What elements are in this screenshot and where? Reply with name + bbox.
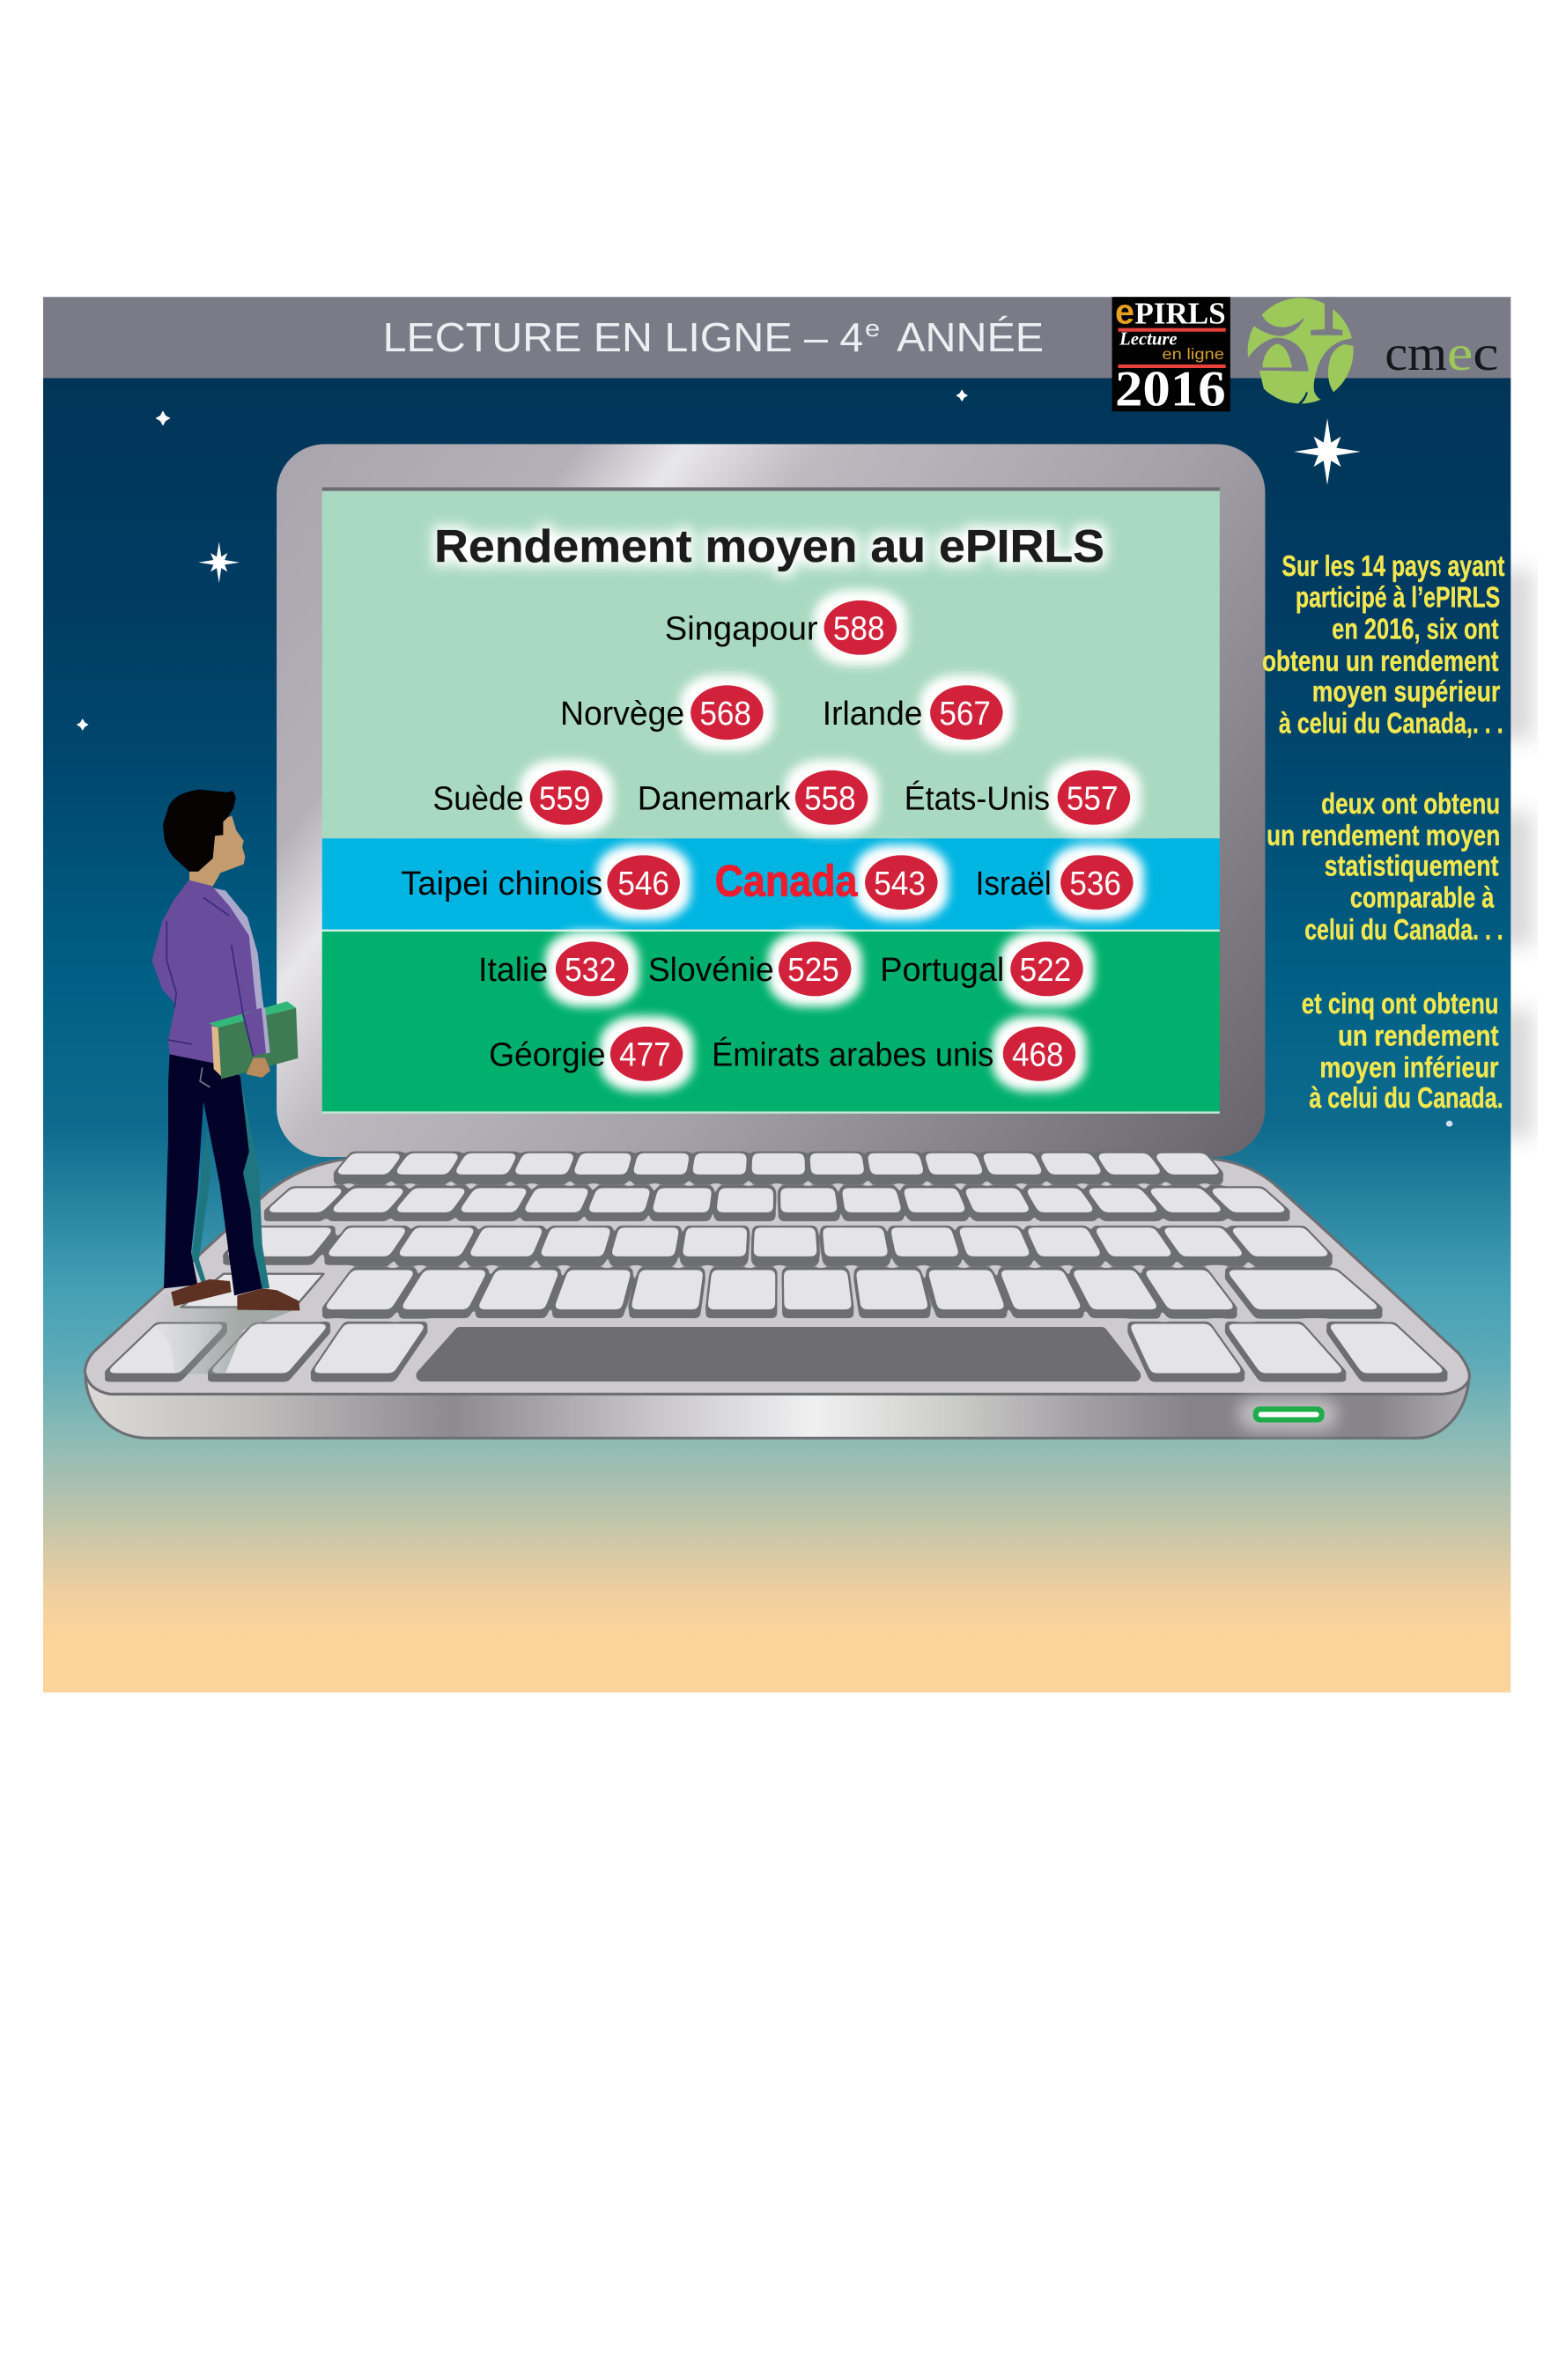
trousers (164, 1054, 262, 1295)
États-Unis: États-Unis (905, 780, 1050, 818)
book (209, 1001, 298, 1079)
leg shadows (240, 1076, 270, 1288)
shoes (171, 1279, 232, 1307)
side text: below Canada: et cinq ont obtenu (1302, 988, 1499, 1021)
forearm (243, 1007, 266, 1056)
neck and face (189, 816, 245, 887)
side text: below Canada (1302, 988, 1503, 1115)
pocket (200, 1067, 210, 1087)
logo: ePIRLS 2016: e (1115, 292, 1134, 331)
keyboard keys (106, 1153, 1447, 1380)
Norvège: Norvège (560, 696, 684, 733)
status LED (1237, 1397, 1338, 1431)
screen title: Rendement moyen au ePIRLS (434, 520, 1104, 571)
logo: ePIRLS 2016 (1112, 292, 1230, 416)
hair (163, 790, 236, 872)
side shadows (1494, 570, 1533, 1138)
Géorgie: Géorgie (489, 1037, 606, 1074)
stars (77, 389, 1452, 1127)
side text: above Canada: moyen supérieur (1312, 675, 1500, 708)
Portugal: 522 (1020, 952, 1071, 989)
header title (383, 314, 1044, 360)
header title: LECTURE EN LIGNE – 4 (383, 314, 863, 360)
Émirats arabes unis (712, 1027, 1075, 1081)
side text: comparable: comparable à (1350, 882, 1495, 915)
Suède: 559 (539, 781, 590, 818)
laptop screen (322, 487, 1220, 1114)
Canada: Canada (715, 857, 858, 906)
logo: cmec (1385, 326, 1499, 381)
Italie: 532 (565, 952, 617, 989)
Géorgie: 477 (619, 1037, 671, 1074)
side text: comparable (1267, 788, 1503, 947)
Israël: Israël (976, 866, 1052, 903)
Slovénie: Slovénie (648, 952, 774, 989)
spacebar (422, 1333, 1134, 1375)
Suède (432, 770, 602, 825)
Irlande (823, 685, 1003, 740)
foot shadow (152, 1293, 298, 1374)
États-Unis (905, 770, 1130, 825)
country scores (401, 601, 1134, 1081)
Géorgie (489, 1027, 683, 1081)
Norvège (560, 685, 764, 740)
Irlande: 567 (939, 696, 991, 733)
lit key under feet (181, 1274, 323, 1308)
logo: ePIRLS 2016: 2016 (1115, 361, 1226, 416)
Israël (976, 855, 1134, 910)
base front edge (85, 1372, 1468, 1438)
header bar (43, 297, 1510, 378)
logo: ePIRLS 2016: PIRLS (1134, 297, 1226, 330)
Danemark: 558 (804, 781, 856, 818)
Singapour: Singapour (665, 611, 818, 648)
Émirats arabes unis: 468 (1012, 1037, 1063, 1074)
Danemark: Danemark (638, 781, 791, 818)
Émirats arabes unis: Émirats arabes unis (712, 1036, 993, 1074)
screen band: comparable (322, 838, 1220, 930)
keyboard base (85, 1158, 1469, 1438)
Singapour (665, 601, 897, 655)
Slovénie: 525 (787, 952, 839, 989)
header title: e (865, 317, 880, 342)
screen band: above Canada (322, 490, 1220, 838)
logo: cmec: cm (1385, 326, 1447, 381)
side text: above Canada: en 2016, six ont (1332, 614, 1499, 646)
Singapour: 588 (833, 611, 884, 648)
logo: cmec: c (1473, 326, 1499, 381)
sweater highlight (214, 888, 270, 1055)
side text: comparable: statistiquement (1325, 850, 1499, 882)
side text: above Canada (1262, 550, 1504, 741)
Taipei chinois: Taipei chinois (401, 866, 602, 903)
logo: ePIRLS 2016: en ligne (1162, 345, 1224, 363)
base top deck (85, 1158, 1469, 1394)
hand (246, 1058, 270, 1078)
person with book (152, 790, 299, 1311)
Italie: Italie (478, 952, 548, 989)
Suède: Suède (432, 781, 524, 818)
Slovénie (648, 941, 852, 996)
États-Unis: 557 (1067, 781, 1118, 818)
background panel (43, 378, 1510, 1692)
side text: below Canada: un rendement (1338, 1020, 1499, 1052)
laptop screen bezel (277, 444, 1265, 1157)
Portugal (880, 941, 1083, 996)
Irlande: Irlande (823, 696, 922, 733)
logo: green emblem (1244, 293, 1356, 404)
Danemark (638, 770, 868, 825)
side text: comparable: deux ont obtenu (1321, 788, 1500, 821)
Taipei chinois: 546 (617, 866, 669, 903)
logo: ePIRLS 2016: Lecture (1119, 328, 1178, 349)
Norvège: 568 (699, 696, 751, 733)
header title: ANNÉE (897, 314, 1044, 360)
logo: cmec: e (1447, 326, 1473, 381)
Taipei chinois (401, 855, 680, 910)
Israël: 536 (1069, 866, 1121, 903)
Portugal: Portugal (880, 952, 1004, 989)
side text: below Canada: moyen inférieur (1319, 1052, 1499, 1085)
Italie (478, 941, 628, 996)
Canada: 543 (874, 866, 926, 903)
screen band: below Canada (322, 931, 1220, 1111)
Canada (715, 855, 938, 910)
sweater (152, 881, 270, 1064)
sweater folds (166, 897, 229, 1044)
